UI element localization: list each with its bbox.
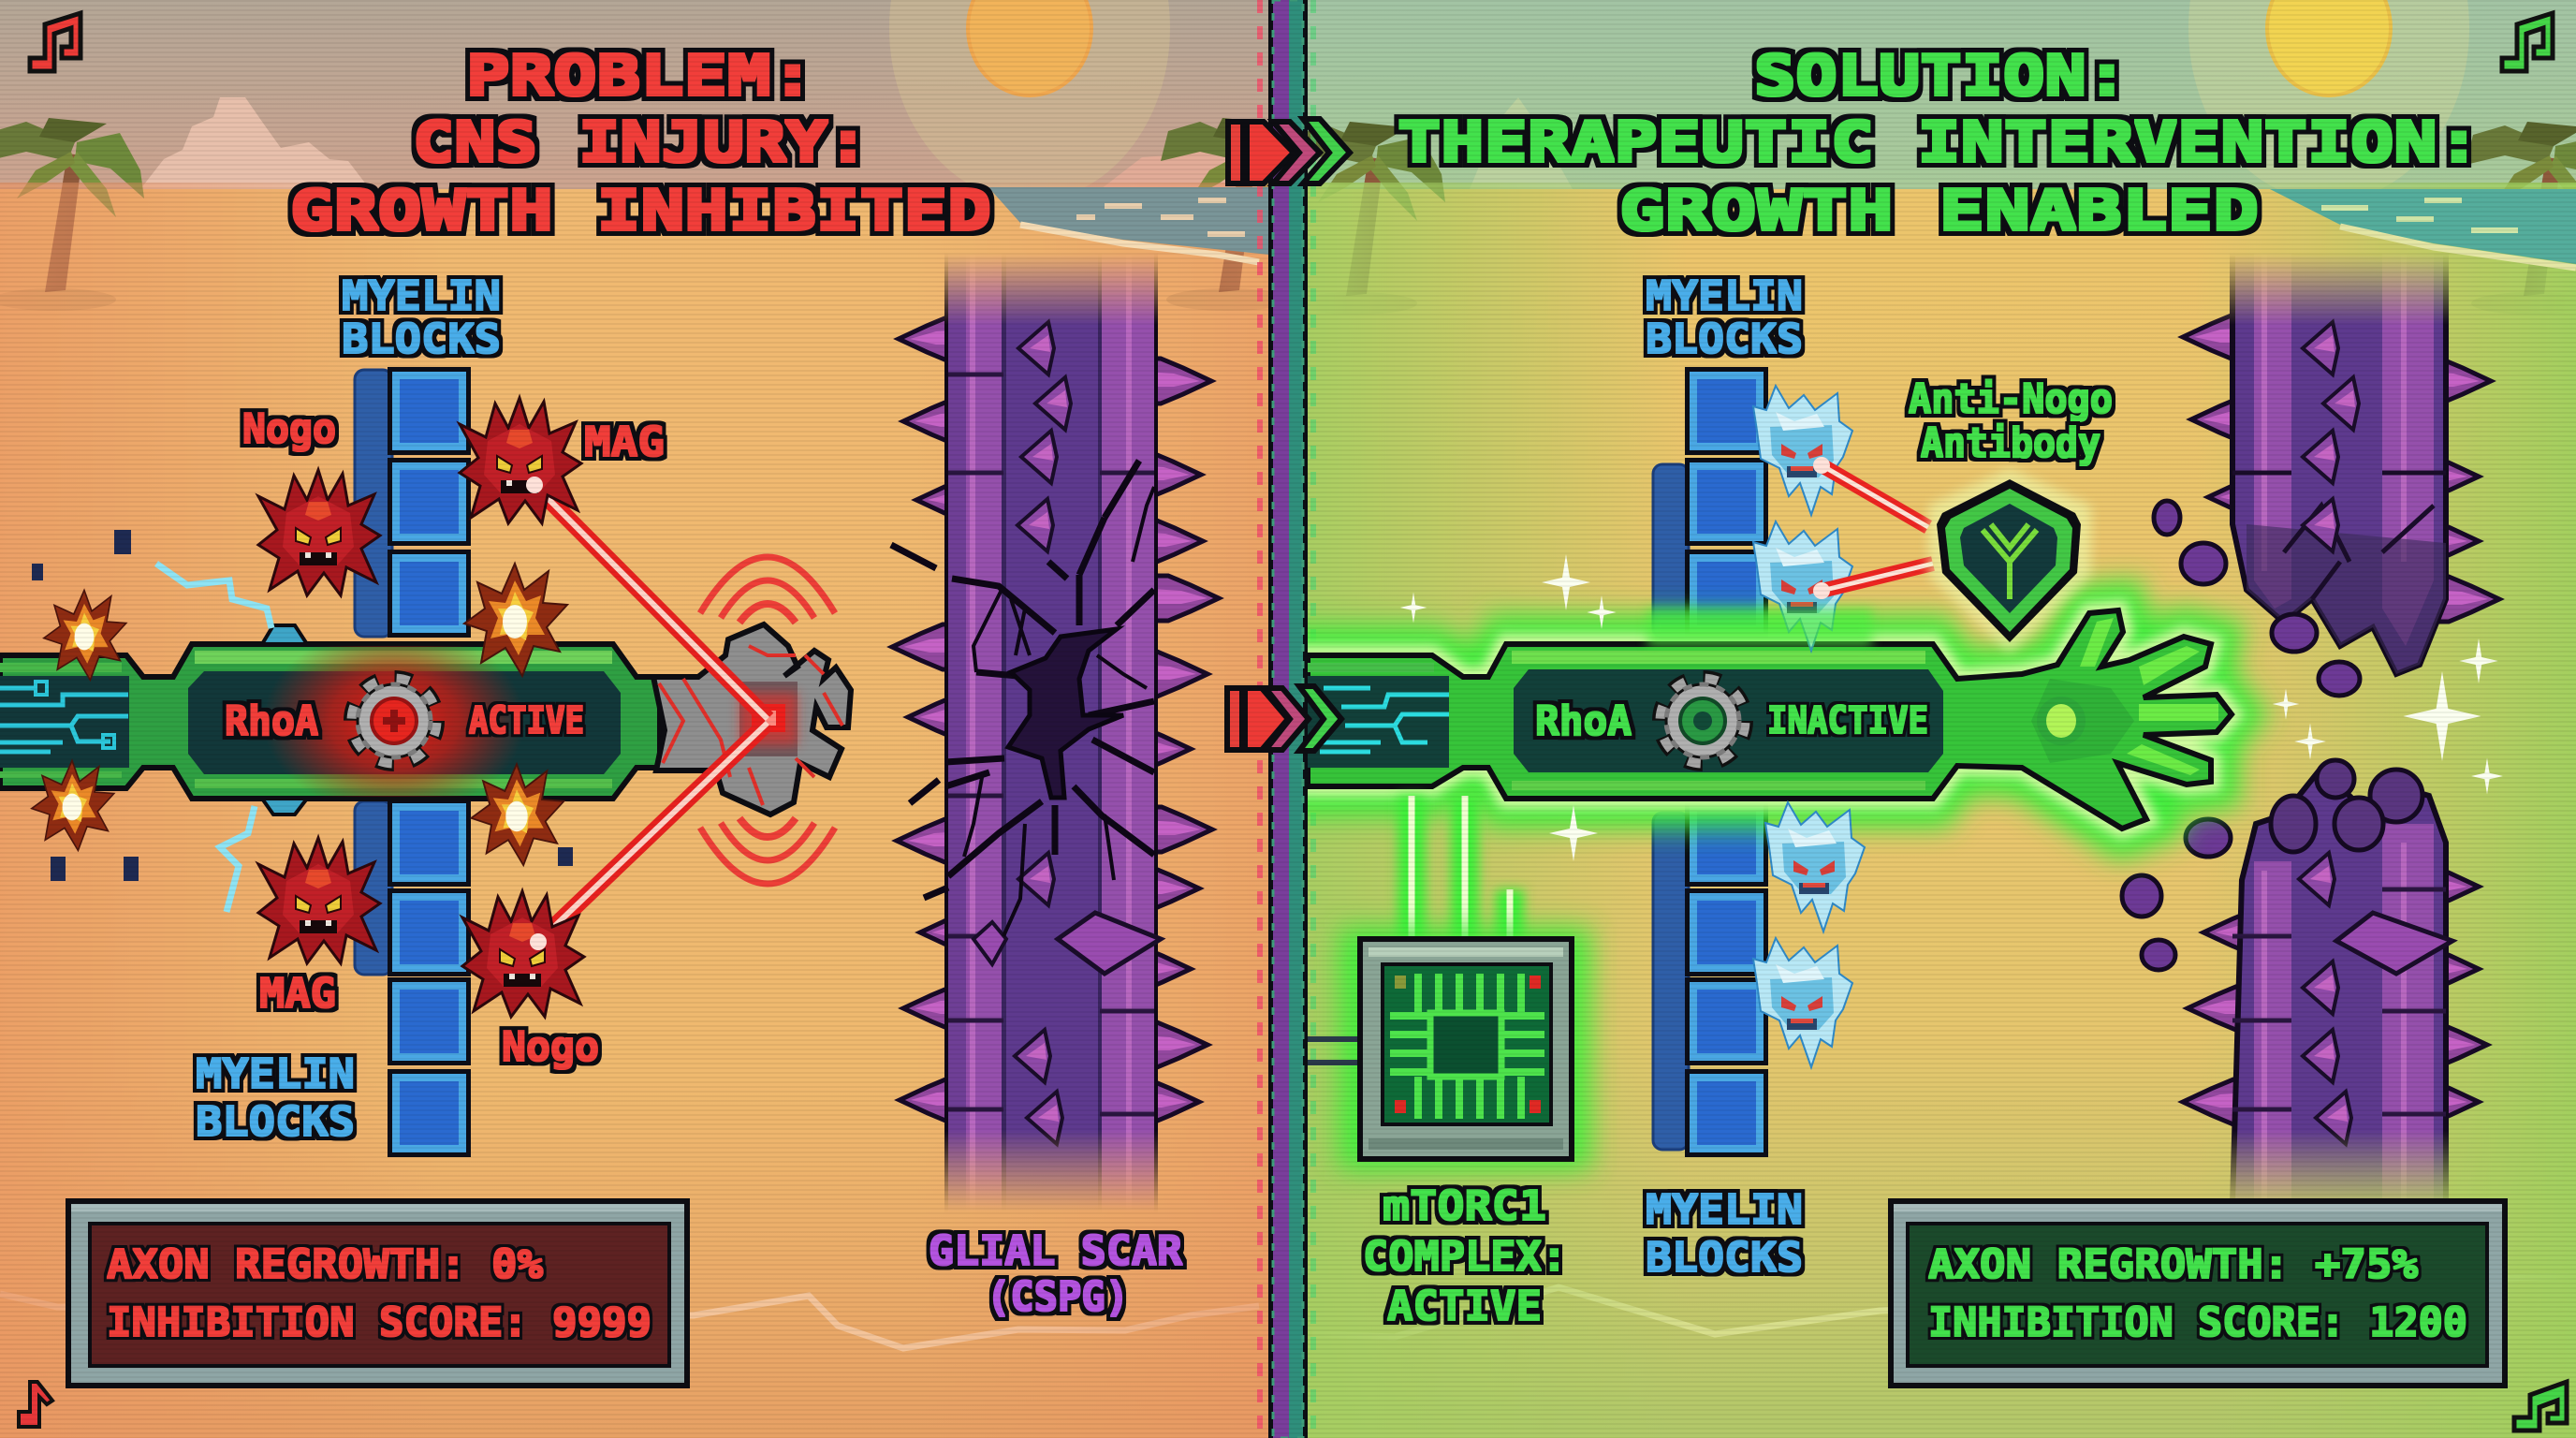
label: myelin blocks lower right: BLOCKS	[1646, 1234, 1803, 1282]
label: mTORC1 complex active: COMPLEX:	[1363, 1233, 1567, 1281]
explosions on axon	[32, 530, 573, 881]
status panel: solution: AXON REGROWTH: +75%	[1928, 1241, 2418, 1288]
icon: music note bottom right	[2514, 1382, 2567, 1431]
frozen monster: upper 1	[1753, 386, 1852, 515]
label: active state: ACTIVE	[469, 699, 584, 742]
label: mTORC1 complex active: mTORC1	[1383, 1182, 1546, 1230]
title: solution: SOLUTION:	[1754, 43, 2128, 108]
label: glial scar	[929, 1227, 1183, 1321]
label: myelin blocks lower left	[196, 1050, 355, 1146]
panel: solution background	[1288, 0, 2576, 1438]
damaged grey growth cone	[653, 624, 851, 814]
status panel: solution	[1888, 1198, 2508, 1388]
arrow: top problem to solution	[1228, 119, 1350, 183]
label: anti-Nogo antibody: Antibody	[1921, 419, 2100, 467]
monster: Nogo upper	[258, 470, 380, 595]
label: myelin blocks lower right	[1646, 1186, 1803, 1282]
sparkles	[1400, 554, 2503, 861]
axon and growing hand: solution	[1308, 610, 2232, 829]
label: RhoA inactive: RhoA	[1535, 697, 1632, 745]
monster: Nogo lower	[462, 891, 584, 1017]
gear: RhoA inactive	[1662, 681, 1743, 761]
antibody laser beams	[1813, 457, 1933, 599]
label: RhoA active: RhoA	[225, 697, 318, 745]
mTORC1 chip	[1308, 927, 1591, 1170]
monster: MAG lower	[258, 838, 380, 963]
label: myelin blocks lower right: MYELIN	[1646, 1186, 1803, 1234]
status panel: problem: AXON REGROWTH: 0%	[107, 1241, 543, 1288]
label: myelin blocks top left: MYELIN	[342, 272, 501, 320]
label: glial scar: GLIAL SCAR	[929, 1227, 1183, 1275]
blue connectors on axon: problem	[262, 625, 307, 814]
myelin blocks column: solution	[1653, 367, 1768, 1157]
title: problem: PROBLEM:	[466, 43, 814, 108]
label: myelin blocks top left	[342, 272, 501, 363]
energy streams to axon	[1412, 796, 1510, 939]
label: MAG upper: MAG	[584, 418, 665, 466]
title: solution: THERAPEUTIC INTERVENTION:	[1398, 110, 2481, 174]
glial scar column: problem	[891, 253, 1219, 1212]
title: problem	[290, 43, 991, 242]
divider between panels	[1268, 0, 1308, 1438]
label: mTORC1 complex active	[1363, 1182, 1567, 1330]
axon segment: problem	[0, 644, 660, 799]
panel: problem background	[0, 0, 1318, 1438]
icon: music note bottom left	[19, 1382, 52, 1427]
rock debris from broken scar	[2122, 501, 2422, 970]
label: MAG lower: MAG	[259, 970, 336, 1018]
glial scar column: solution, broken into two parts	[2183, 253, 2499, 1203]
label: anti-Nogo antibody	[1909, 375, 2113, 467]
label: myelin blocks top right	[1646, 272, 1803, 363]
label: myelin blocks top right: MYELIN	[1646, 272, 1803, 320]
title: solution	[1398, 43, 2481, 242]
laser glow points on monsters	[526, 477, 547, 950]
label: inactive state: INACTIVE	[1767, 699, 1928, 742]
label: myelin blocks top left: BLOCKS	[342, 315, 501, 363]
label: anti-Nogo antibody: Anti-Nogo	[1909, 375, 2113, 423]
label: glial scar: (CSPG)	[987, 1273, 1129, 1321]
icon: music note top left	[30, 13, 80, 71]
monster: MAG upper	[460, 398, 581, 523]
label: myelin blocks lower left: MYELIN	[196, 1050, 355, 1098]
label: Nogo upper: Nogo	[242, 405, 336, 453]
frozen monster: lower 2	[1753, 938, 1852, 1067]
arm overlay glow over frozen monsters	[1647, 609, 1872, 646]
title: problem: CNS INJURY:	[413, 110, 869, 174]
label: myelin blocks top right: BLOCKS	[1646, 315, 1803, 363]
arrow: axon problem to solution	[1227, 686, 1341, 751]
status panel: problem	[66, 1198, 690, 1388]
title: problem: GROWTH INHIBITED	[290, 178, 991, 242]
gear: RhoA active	[354, 681, 434, 761]
label: myelin blocks lower left: BLOCKS	[196, 1098, 355, 1146]
status panel: problem: INHIBITION SCORE: 9999	[107, 1299, 651, 1346]
lightning sparks	[156, 564, 271, 912]
signal arcs above growth cone	[700, 557, 835, 623]
status panel: solution: INHIBITION SCORE: 1200	[1928, 1299, 2467, 1346]
label: mTORC1 complex active: ACTIVE	[1387, 1283, 1542, 1330]
frozen monster: upper 2	[1753, 521, 1852, 651]
arm glow: solution	[1308, 610, 2232, 829]
icon: music note top right	[2502, 13, 2553, 71]
laser beams to growth cone	[534, 484, 768, 942]
shield: anti-Nogo antibody	[1928, 468, 2091, 653]
label: Nogo lower: Nogo	[502, 1023, 599, 1071]
title: solution: GROWTH ENABLED	[1619, 178, 2259, 242]
myelin blocks column: problem	[355, 367, 471, 1157]
frozen monster: lower 1	[1765, 802, 1865, 932]
signal arcs below growth cone	[700, 818, 835, 884]
